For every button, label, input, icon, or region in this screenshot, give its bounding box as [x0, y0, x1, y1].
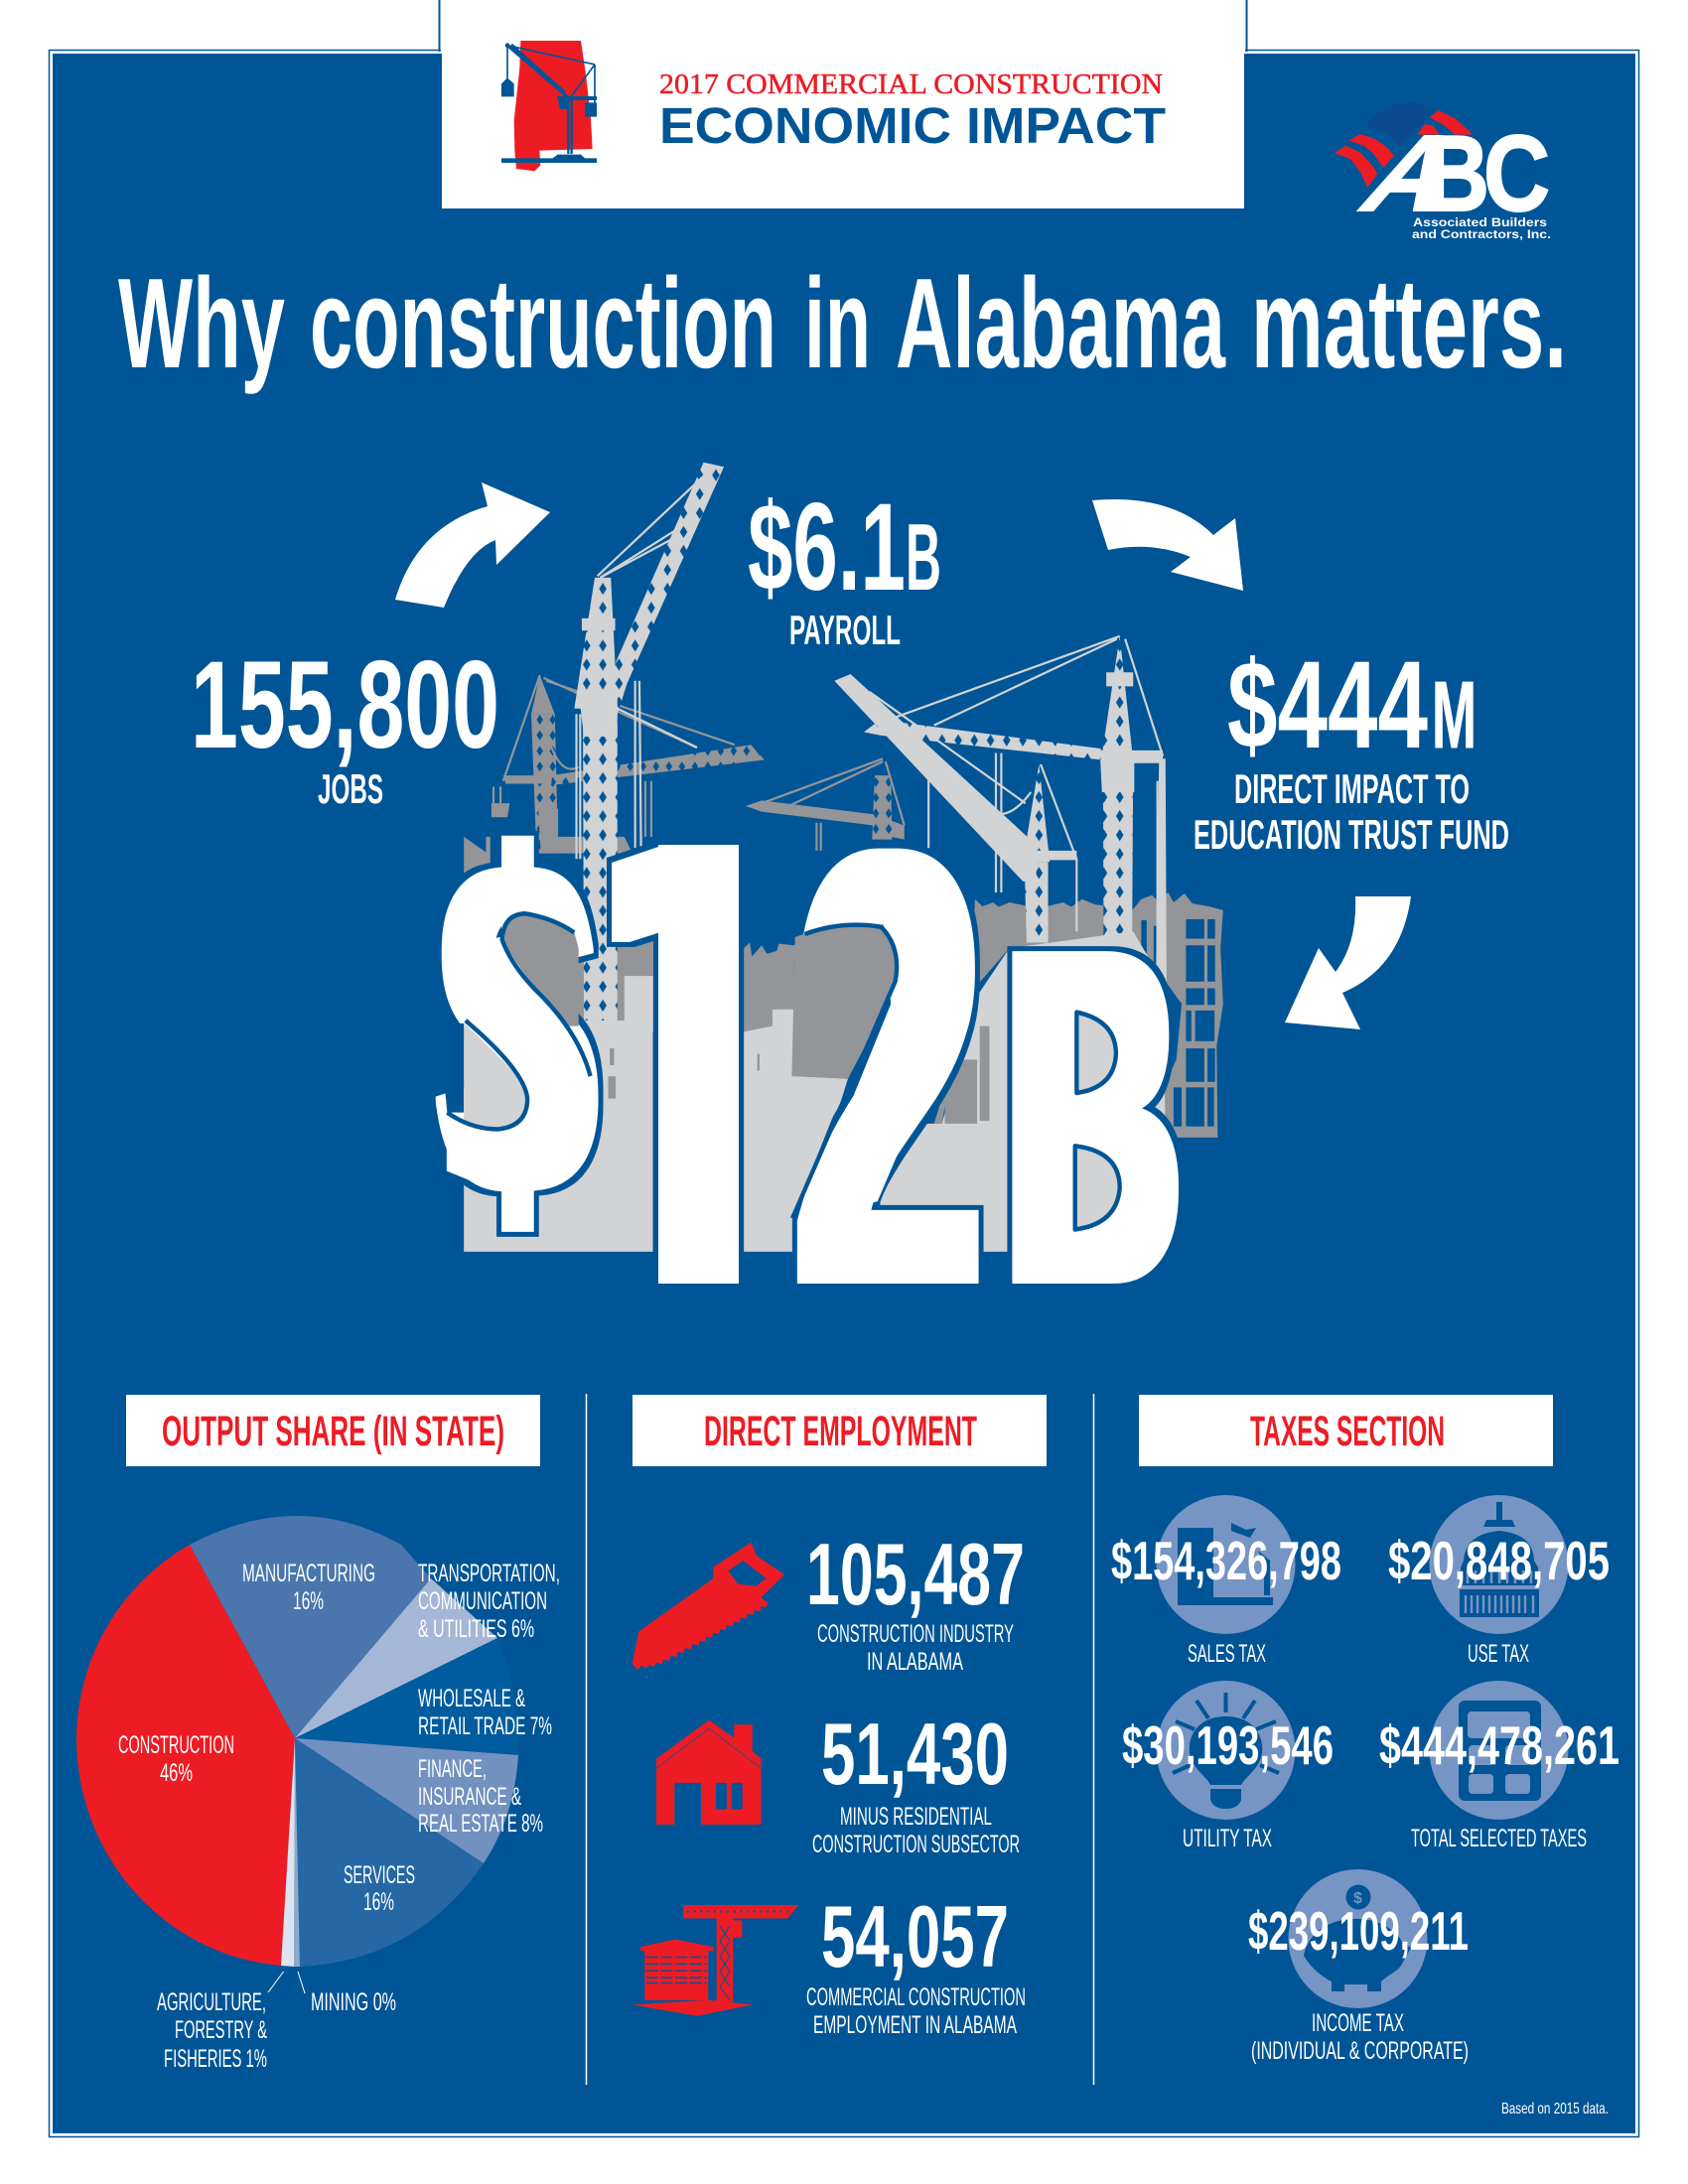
dark crane centre: [746, 758, 905, 851]
light skyline: [464, 931, 1166, 1252]
heading: output share: OUTPUT SHARE (IN STATE): [162, 1408, 504, 1455]
pie labels: REAL ESTATE 8%: [418, 1810, 543, 1838]
pie labels: INSURANCE &: [418, 1783, 521, 1811]
stat: $6.1B payroll: [748, 478, 941, 653]
icon: crane and building: [633, 1905, 798, 2016]
subtitle: 2017 commercial construction: 2017 COMMERCIAL CONSTRUCTION: [659, 68, 1163, 100]
pie labels: SERVICES: [344, 1861, 415, 1889]
stat: total selected taxes: [1379, 1714, 1619, 1852]
stat: sales tax: SALES TAX: [1188, 1640, 1266, 1668]
stat: $444M education trust fund: $444: [1227, 636, 1428, 774]
stat: 54,057: COMMERCIAL CONSTRUCTION: [806, 1983, 1026, 2011]
big number: $12B: 2: [794, 725, 983, 1414]
pie labels: WHOLESALE &: [418, 1685, 525, 1712]
stat: 155,800 jobs: JOBS: [318, 765, 383, 812]
big number: $12B: [435, 830, 1179, 1284]
pie labels: FORESTRY &: [175, 2016, 267, 2044]
$ body fill: [444, 937, 591, 1187]
skyline details: [471, 1026, 989, 1124]
stat: $6.1B payroll: $6.1: [748, 478, 906, 616]
heading: taxes section: TAXES SECTION: [1250, 1408, 1445, 1455]
stat: sales tax: $154,326,798: [1111, 1530, 1341, 1591]
icon: house: [656, 1720, 762, 1825]
stat: income tax: $239,109,211: [1248, 1900, 1469, 1962]
title: in: [804, 252, 871, 395]
icon: sales tax register: [1156, 1495, 1295, 1634]
heading: direct employment: DIRECT EMPLOYMENT: [704, 1408, 977, 1455]
pie labels: MANUFACTURING: [242, 1560, 375, 1587]
icon: total taxes calculator: [1430, 1681, 1569, 1820]
stat: 54,057: 54,057: [821, 1887, 1009, 1985]
2 body fill and counter: [804, 892, 966, 1215]
pie labels: TRANSPORTATION,: [418, 1560, 560, 1587]
light crane left: [574, 463, 724, 1026]
arrow: payroll to education: [1092, 499, 1243, 591]
scaffolding gaps: [1141, 919, 1215, 1127]
dark crane left: [492, 675, 765, 854]
title: [118, 252, 1567, 395]
stat: $6.1B payroll: B: [906, 504, 941, 611]
stat: sales tax: [1111, 1530, 1341, 1668]
stat: income tax: (INDIVIDUAL & CORPORATE): [1251, 2037, 1469, 2065]
pie labels: 16%: [293, 1587, 324, 1615]
stat: 105,487: 105,487: [806, 1525, 1025, 1623]
stat: 51,430: 51,430: [821, 1705, 1009, 1803]
stat: utility tax: $30,193,546: [1122, 1714, 1334, 1776]
pie labels: [118, 1560, 560, 2073]
icon: use tax capitol: [1430, 1495, 1569, 1634]
icon: saw: [633, 1543, 784, 1670]
title: Why: [118, 252, 285, 395]
dark skyline: [464, 837, 1223, 1138]
icon: ABC logo: [1335, 101, 1551, 241]
stat: $444M education trust fund: [1194, 636, 1509, 858]
title: construction: [310, 252, 776, 395]
pie labels: MINING 0%: [311, 1988, 396, 2016]
B body fill and counters: [1057, 1004, 1131, 1100]
icon: ABC logo: and Contractors, Inc.: [1412, 227, 1551, 241]
pie labels: & UTILITIES 6%: [418, 1615, 534, 1643]
big number: $12B: B: [1005, 849, 1181, 1383]
stat: utility tax: [1122, 1714, 1334, 1852]
stat: 105,487: CONSTRUCTION INDUSTRY: [817, 1620, 1014, 1648]
big number: $12B: $: [441, 760, 593, 1297]
pie labels: FINANCE,: [418, 1755, 487, 1783]
stat: 105,487: [806, 1525, 1025, 1676]
pie labels: CONSTRUCTION: [118, 1731, 234, 1759]
stat: 54,057: EMPLOYMENT IN ALABAMA: [813, 2011, 1017, 2039]
heading: economic impact: ECONOMIC IMPACT: [659, 97, 1166, 154]
panel: taxes section: [1111, 1395, 1619, 2117]
$ counters: [502, 913, 579, 1026]
stat: income tax: [1248, 1900, 1469, 2065]
pie labels: 16%: [363, 1888, 394, 1916]
stat: 105,487: IN ALABAMA: [867, 1648, 963, 1676]
stat: 155,800 jobs: [191, 636, 499, 812]
arrow: education to total: [1285, 896, 1411, 1029]
heading: direct employment: [633, 1395, 1047, 1466]
pie labels: COMMUNICATION: [418, 1587, 547, 1615]
icon: ABC logo: A: [1343, 113, 1483, 233]
icon: Alabama state with crane: [501, 41, 597, 171]
icon: utility tax light bulb: [1156, 1681, 1295, 1820]
icon: income tax piggy bank: [1289, 1869, 1428, 2008]
stat: use tax: USE TAX: [1468, 1640, 1529, 1668]
light crane right tall: [864, 636, 1167, 982]
heading: taxes section: [1139, 1395, 1553, 1466]
stat: 51,430: CONSTRUCTION SUBSECTOR: [812, 1831, 1020, 1858]
big number: $12B: 1: [596, 706, 950, 1418]
heading: output share: [126, 1395, 540, 1466]
light crane right diagonal: [834, 674, 1076, 942]
stat: 51,430: [812, 1705, 1020, 1858]
stat: 155,800 jobs: 155,800: [191, 636, 499, 774]
illustration: cranes and skyline: [464, 463, 1223, 1252]
pie chart: [76, 1516, 518, 1993]
title: Alabama: [896, 252, 1226, 395]
panel: direct employment: [633, 1395, 1047, 2039]
pie labels: FISHERIES 1%: [164, 2045, 267, 2073]
stat: $444M education trust fund: DIRECT IMPACT TO: [1234, 765, 1470, 812]
pie labels: 46%: [160, 1759, 193, 1787]
stat: 51,430: MINUS RESIDENTIAL: [840, 1803, 992, 1831]
arrow: jobs to payroll: [395, 482, 550, 608]
stat: $6.1B payroll: PAYROLL: [789, 607, 901, 653]
stat: 54,057: [806, 1887, 1026, 2039]
stat: use tax: $20,848,705: [1388, 1530, 1610, 1591]
pie labels: AGRICULTURE,: [157, 1988, 266, 2016]
panel: output share: [76, 1395, 560, 2073]
stat: utility tax: UTILITY TAX: [1183, 1825, 1272, 1852]
footnote: Based on 2015 data.: [1501, 2101, 1609, 2117]
icon: ABC logo: Associated Builders: [1413, 215, 1547, 229]
icon: ABC logo: B: [1424, 113, 1489, 234]
icon: income tax piggy bank: $: [1353, 1890, 1362, 1907]
panel: header banner: [439, 0, 1247, 208]
stat: $444M education trust fund: M: [1432, 662, 1477, 768]
pie labels: RETAIL TRADE 7%: [418, 1712, 552, 1740]
stat: use tax: [1388, 1530, 1610, 1668]
icon: ABC logo: C: [1483, 113, 1550, 234]
stat: income tax: INCOME TAX: [1312, 2009, 1404, 2037]
